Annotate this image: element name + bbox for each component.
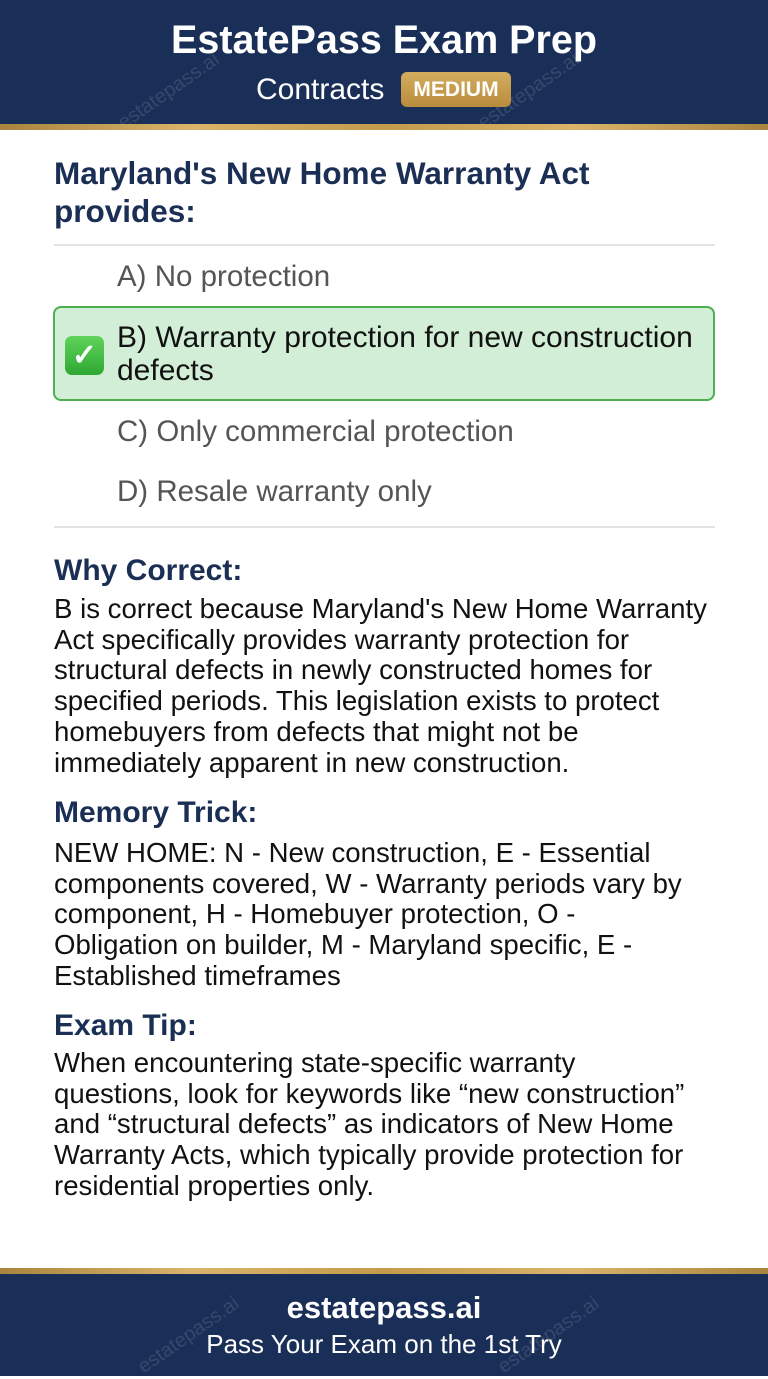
- exam tip text: and “structural defects” as indicators of New Home: [54, 1108, 674, 1139]
- memory trick text: NEW HOME: N - New construction, E - Essential: [54, 837, 650, 868]
- explanation text: immediately apparent in new construction.: [54, 747, 569, 778]
- watermark: estatepass.ai: [114, 48, 223, 134]
- memory trick text: [54, 837, 682, 991]
- watermark: estatepass.ai: [474, 48, 583, 134]
- question heading: [54, 155, 590, 229]
- exam tip text: When encountering state-specific warranty: [54, 1047, 575, 1078]
- exam tip text: [54, 1047, 684, 1201]
- icon: checkmark: [65, 336, 104, 375]
- question heading: provides:: [54, 193, 196, 229]
- option C: C) Only commercial protection: [117, 415, 514, 448]
- option A: A) No protection: [117, 260, 330, 293]
- answer text: defects: [117, 354, 214, 387]
- subtitle with badge: [256, 72, 511, 107]
- footer tagline: Pass Your Exam on the 1st Try: [206, 1329, 562, 1359]
- icon: checkmark: ✓: [72, 339, 97, 372]
- exam tip text: questions, look for keywords like “new construction”: [54, 1078, 684, 1109]
- badge: difficulty: [401, 72, 511, 107]
- exam tip text: residential properties only.: [54, 1170, 374, 1201]
- heading: why correct: Why Correct:: [54, 554, 242, 587]
- footer band: [0, 1274, 768, 1376]
- explanation text: Act specifically provides warranty protection for: [54, 624, 629, 655]
- header title: EstatePass Exam Prep: [171, 18, 597, 62]
- explanation text: B is correct because Maryland's New Home Warranty: [54, 593, 707, 624]
- memory trick text: component, H - Homebuyer protection, O -: [54, 898, 575, 929]
- badge: difficulty: MEDIUM: [413, 78, 499, 101]
- option B correct: [53, 306, 715, 401]
- watermark: estatepass.ai: [134, 1292, 243, 1378]
- footer site: estatepass.ai: [287, 1290, 481, 1325]
- heading: exam tip: Exam Tip:: [54, 1009, 197, 1042]
- explanation text: specified periods. This legislation exists to protect: [54, 685, 659, 716]
- explanation text: homebuyers from defects that might not be: [54, 716, 579, 747]
- question heading: Maryland's New Home Warranty Act: [54, 155, 590, 191]
- memory trick text: Obligation on builder, M - Maryland specific, E -: [54, 929, 632, 960]
- explanation text: [54, 593, 707, 778]
- memory trick text: Established timeframes: [54, 960, 341, 991]
- category: Contracts: [256, 73, 384, 106]
- watermark: estatepass.ai: [494, 1292, 603, 1378]
- explanation text: structural defects in newly constructed homes for: [54, 654, 652, 685]
- heading: memory trick: Memory Trick:: [54, 796, 257, 829]
- answer text: [117, 321, 693, 387]
- answer text: B) Warranty protection for new construction: [117, 321, 693, 354]
- header band: [0, 0, 768, 124]
- exam tip text: Warranty Acts, which typically provide protection for: [54, 1139, 683, 1170]
- memory trick text: components covered, W - Warranty periods vary by: [54, 868, 682, 899]
- option D: D) Resale warranty only: [117, 475, 432, 508]
